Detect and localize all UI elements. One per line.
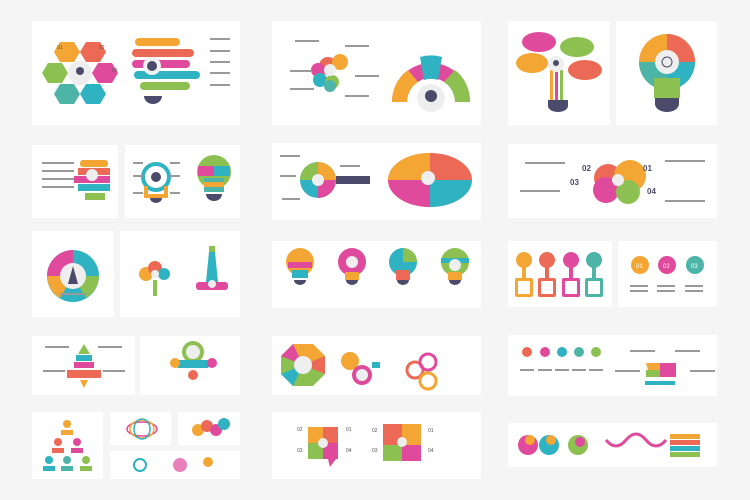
card: puzzle with numbers xyxy=(508,144,717,218)
card: three lit bulbs xyxy=(618,241,717,307)
card: key circle and brain xyxy=(272,143,481,220)
card: leaf bulb xyxy=(508,21,610,125)
card: rocket semicircle xyxy=(32,231,114,317)
card: brain gear xyxy=(140,336,240,395)
card: square puzzle: 01 xyxy=(428,428,434,434)
card: hexagon flower and bulb bars: 03 xyxy=(112,68,118,74)
card: four bulbs xyxy=(272,241,481,308)
card: hexagon flower and bulb bars: 01 xyxy=(57,45,63,51)
card: head xyxy=(32,145,118,218)
card: segmented bulb xyxy=(616,21,717,125)
card: four pins xyxy=(508,241,612,307)
card: puzzle with numbers: 04 xyxy=(647,187,656,196)
card: square puzzle: 02 xyxy=(297,427,303,433)
card: rocket xyxy=(32,336,135,395)
card: puzzle with numbers: 03 xyxy=(570,178,579,187)
card: puzzle with numbers: 01 xyxy=(643,164,652,173)
card: square puzzle xyxy=(272,412,481,479)
card: small bulbs and cup xyxy=(508,335,717,396)
card: square puzzle: 01 xyxy=(346,427,352,433)
card: hexagon flower and bulb bars xyxy=(32,21,240,125)
card: puzzle with numbers: 02 xyxy=(582,164,591,173)
card: square puzzle: 02 xyxy=(372,428,378,434)
card: three small diagrams xyxy=(110,451,240,479)
card: square puzzle: 03 xyxy=(372,448,378,454)
card: puzzle row xyxy=(178,412,240,445)
card: puzzle and brain arc xyxy=(272,21,481,125)
card: square puzzle: 04 xyxy=(346,448,352,454)
card: square puzzle: 04 xyxy=(428,448,434,454)
card: heads, wave, banners xyxy=(508,423,717,467)
card: people pyramid xyxy=(32,412,103,479)
card: three lit bulbs: 01 xyxy=(636,264,643,270)
card: hexagon flower and bulb bars: 02 xyxy=(99,45,105,51)
card: square puzzle: 03 xyxy=(297,448,303,454)
card: octagon, bulb and gears xyxy=(272,336,481,395)
card: orbit xyxy=(110,412,171,445)
card: three lit bulbs: 02 xyxy=(663,264,670,270)
card: bulb outline and segmented bulb xyxy=(125,145,240,218)
card: puzzle key and tower xyxy=(120,231,240,317)
card: three lit bulbs: 03 xyxy=(691,264,698,270)
